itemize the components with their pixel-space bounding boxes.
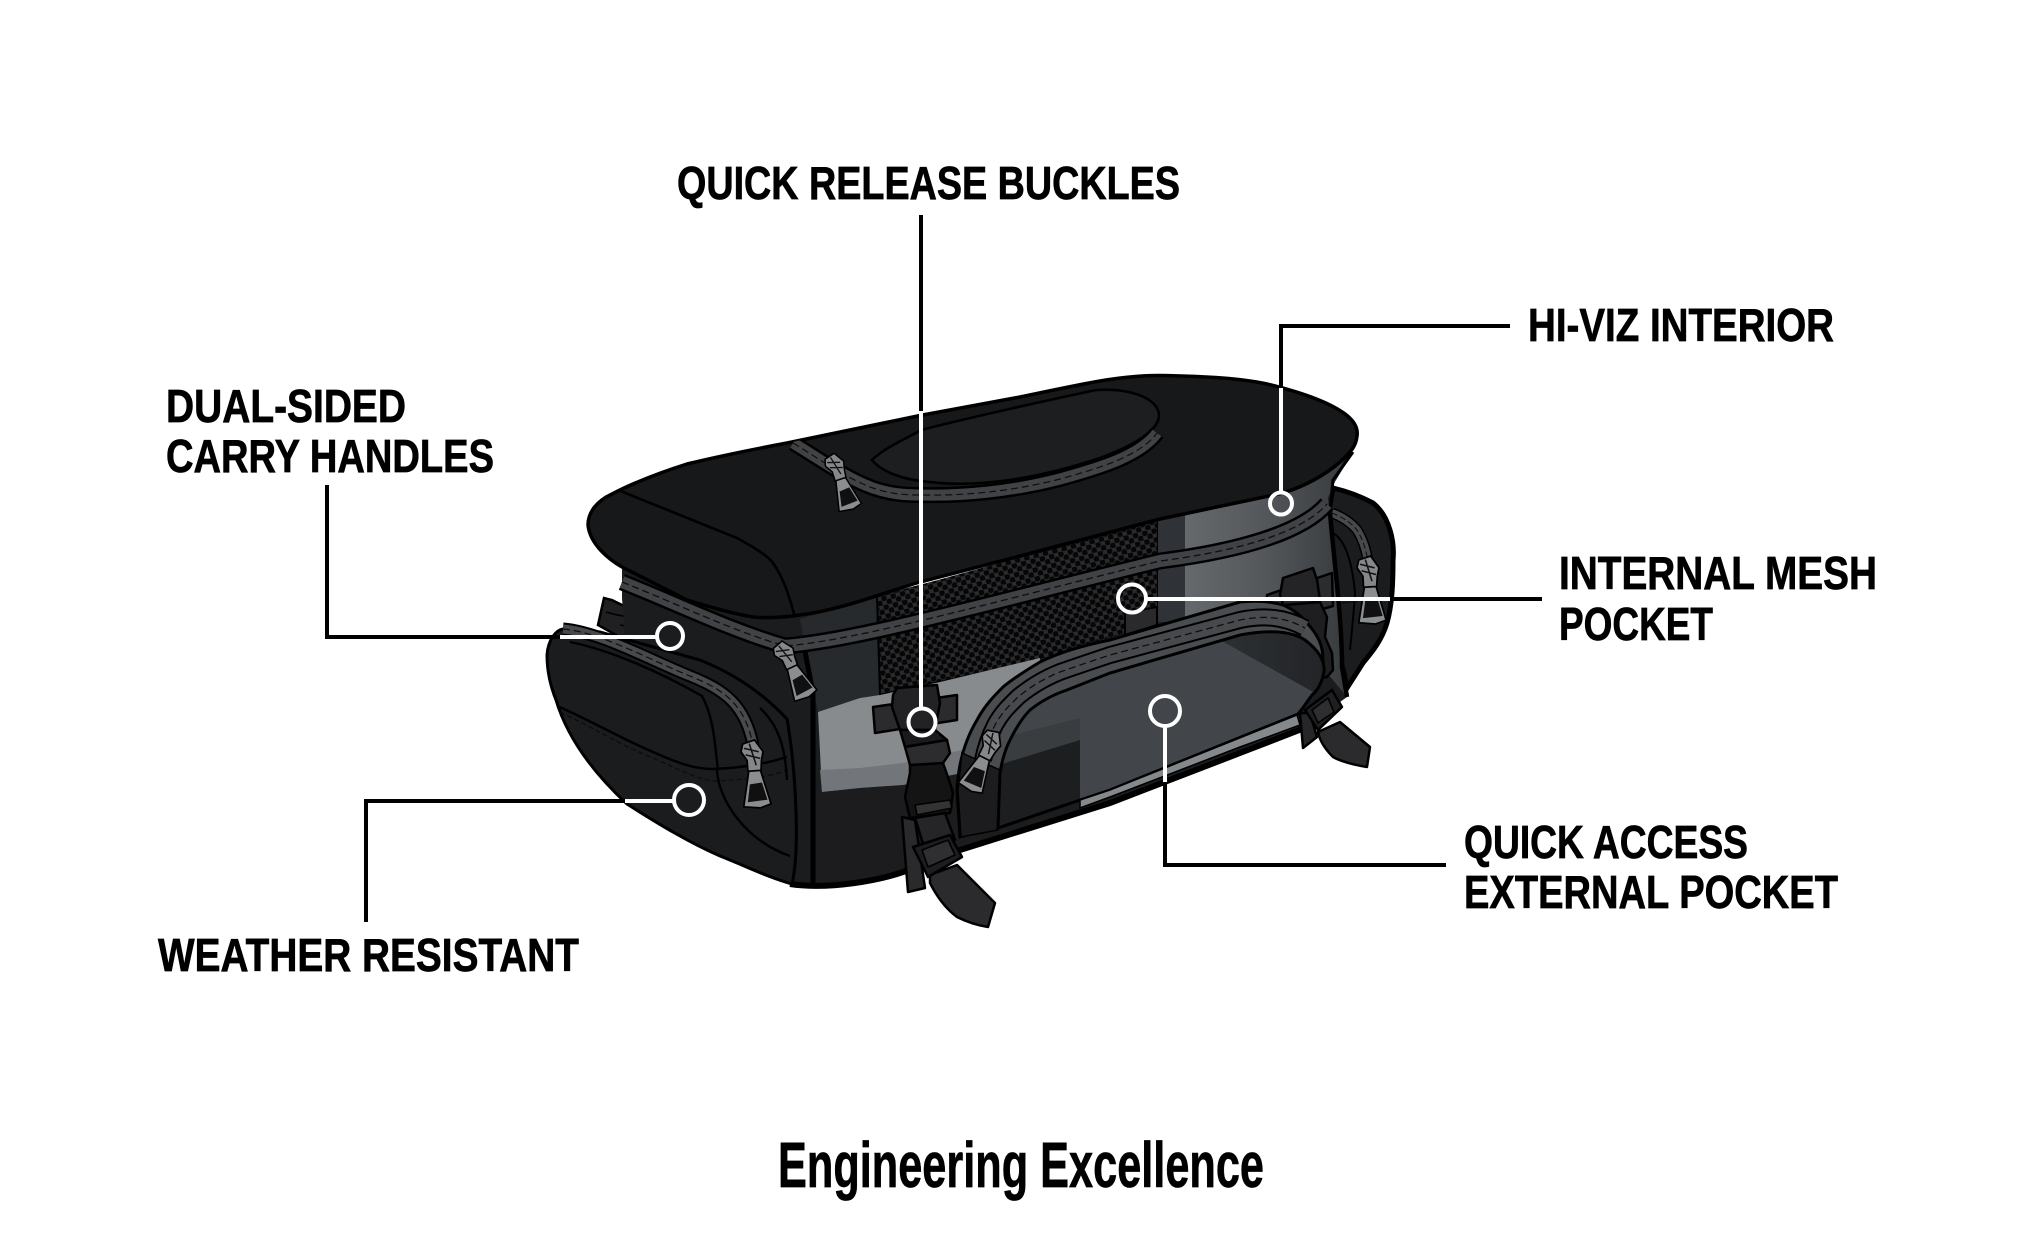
upper dark panel [800, 597, 880, 712]
body main panel [622, 452, 1353, 886]
outline bottom [790, 729, 1302, 886]
pocket window [998, 632, 1324, 828]
title: Engineering Excellence [778, 1129, 1264, 1201]
callout: dual-sided carry handles [166, 380, 683, 649]
callout: internal mesh pocket [1118, 547, 1877, 650]
callout: quick release buckles [677, 157, 1180, 736]
lower black panel [813, 773, 962, 886]
shell lower shadow [958, 753, 1000, 837]
callout: hi-viz interior [1270, 299, 1834, 514]
callout: quick access external pocket [1150, 696, 1838, 918]
mesh pocket tab [1125, 607, 1157, 635]
left buckle strap [873, 685, 995, 927]
mesh panel [877, 519, 1158, 695]
top lid [588, 375, 1357, 618]
right buckle strap lower [1300, 690, 1370, 767]
left side pocket [547, 629, 796, 884]
callout: quick access external pocket: EXTERNAL POCKET [1464, 866, 1838, 918]
corner post [803, 641, 813, 885]
callout: internal mesh pocket: POCKET [1559, 598, 1713, 650]
callout: dual-sided carry handles: CARRY HANDLES [166, 430, 494, 482]
pocket zipper [983, 617, 1305, 760]
external quick access pocket [957, 601, 1335, 837]
callout: dual-sided carry handles: DUAL-SIDED [166, 380, 406, 432]
hi-viz panel gradient [1185, 458, 1347, 697]
bag illustration [547, 375, 1393, 927]
dark strip [1158, 512, 1185, 622]
right side pocket [1320, 488, 1393, 688]
callout: quick access external pocket: QUICK ACCESS [1464, 816, 1748, 868]
light strip under pocket [1080, 715, 1300, 808]
right buckle strap upper [1267, 568, 1333, 680]
callout: weather resistant [158, 785, 704, 981]
grey light band [818, 658, 1040, 792]
carry handle [598, 598, 788, 686]
callout: internal mesh pocket: INTERNAL MESH [1559, 547, 1877, 599]
pocket shell [957, 601, 1323, 837]
callout: hi-viz interior: HI-VIZ INTERIOR [1528, 299, 1834, 351]
callout: weather resistant: WEATHER RESISTANT [158, 929, 579, 981]
callout: quick release buckles: QUICK RELEASE BUCKLES [677, 157, 1180, 209]
main zipper [622, 504, 1327, 703]
right panel edge [1330, 513, 1347, 697]
top lid pocket [793, 390, 1159, 495]
